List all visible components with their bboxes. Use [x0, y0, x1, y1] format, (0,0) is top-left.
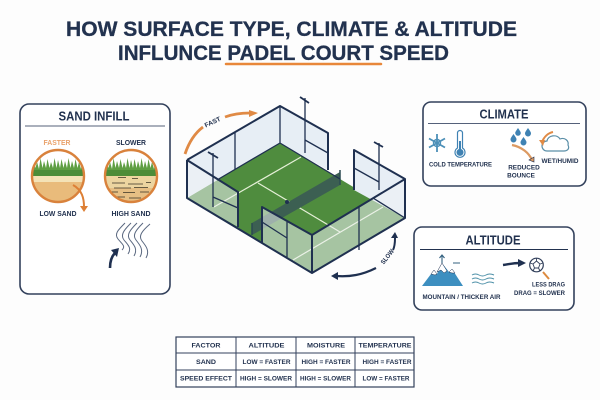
court frame: [187, 97, 405, 273]
drag label: [514, 282, 565, 297]
comparison table: [176, 337, 414, 387]
high sand sample: [103, 138, 159, 218]
icon: rain drops: [510, 128, 531, 146]
table header row: MOISTURE: [307, 342, 345, 350]
mountain label: MOUNTAIN / THICKER AIR: [422, 294, 501, 301]
court illustration: [185, 97, 405, 280]
low sand sample: LOW SAND: [40, 209, 77, 218]
icon: bounce arrow: [512, 145, 534, 162]
slow arrow: SLOW: [380, 248, 396, 266]
wet humid label: WET/HUMID: [542, 158, 579, 165]
speed effect row: [180, 376, 410, 382]
reduced bounce label: REDUCED: [508, 164, 540, 172]
low sand sample: [30, 138, 88, 218]
back walls: [187, 106, 405, 218]
drag label: LESS DRAG: [532, 282, 565, 288]
icon: humid arrow: [539, 132, 553, 146]
panel: climate: [423, 102, 586, 186]
title: HOW SURFACE TYPE, CLIMATE & ALTITUDE: [66, 17, 517, 41]
icon: navy up arrow: [110, 248, 119, 268]
court floor: [187, 143, 405, 273]
sand row: [196, 359, 412, 366]
table header row: ALTITUDE: [248, 342, 285, 350]
table header row: [192, 342, 412, 350]
slow arrow: [331, 232, 398, 280]
icon: mountain: [422, 255, 463, 286]
panel: sand infill: [20, 104, 170, 294]
fast arrow: FAST: [204, 116, 222, 129]
icon: downward orange arrow: [73, 185, 88, 212]
court lines: [214, 157, 383, 260]
title: INFLUNCE PADEL COURT SPEED: [118, 41, 449, 65]
speed effect row: SPEED EFFECT: [180, 376, 233, 382]
sand infill heading: SAND INFILL: [58, 110, 130, 124]
high sand sample: HIGH SAND: [112, 209, 151, 218]
sand row: LOW = FASTER: [242, 359, 291, 366]
speed effect row: LOW = FASTER: [362, 376, 410, 382]
icon: thermometer: [455, 130, 465, 157]
icon: cloud: [542, 136, 569, 151]
climate heading: CLIMATE: [480, 108, 528, 122]
speed effect row: HIGH = SLOWER: [300, 376, 351, 382]
icon: navy arrow: [503, 259, 526, 267]
cold temperature label: COLD TEMPERATURE: [429, 162, 493, 168]
fast arrow: [185, 110, 258, 154]
panel: altitude: [414, 227, 574, 310]
icon: snowflake: [429, 134, 445, 152]
low sand sample: FASTER: [44, 138, 71, 147]
altitude heading: ALTITUDE: [466, 234, 520, 248]
sand row: HIGH = FASTER: [302, 359, 351, 366]
icon: wavy air lines: [116, 223, 150, 258]
icon: air waves: [472, 274, 494, 284]
sand row: HIGH = FASTER: [362, 359, 412, 366]
sand row: SAND: [196, 359, 216, 366]
table header row: TEMPERATURE: [358, 342, 412, 350]
table header row: FACTOR: [192, 342, 221, 350]
icon: padel ball: [530, 258, 549, 279]
title: [66, 17, 517, 65]
high sand sample: SLOWER: [116, 138, 147, 147]
speed effect row: HIGH = SLOWER: [240, 376, 292, 382]
title underline: [226, 63, 381, 65]
drag label: DRAG = SLOWER: [514, 290, 565, 297]
glass front walls: [187, 160, 405, 273]
reduced bounce label: BOUNCE: [507, 172, 536, 180]
net: [252, 170, 340, 235]
